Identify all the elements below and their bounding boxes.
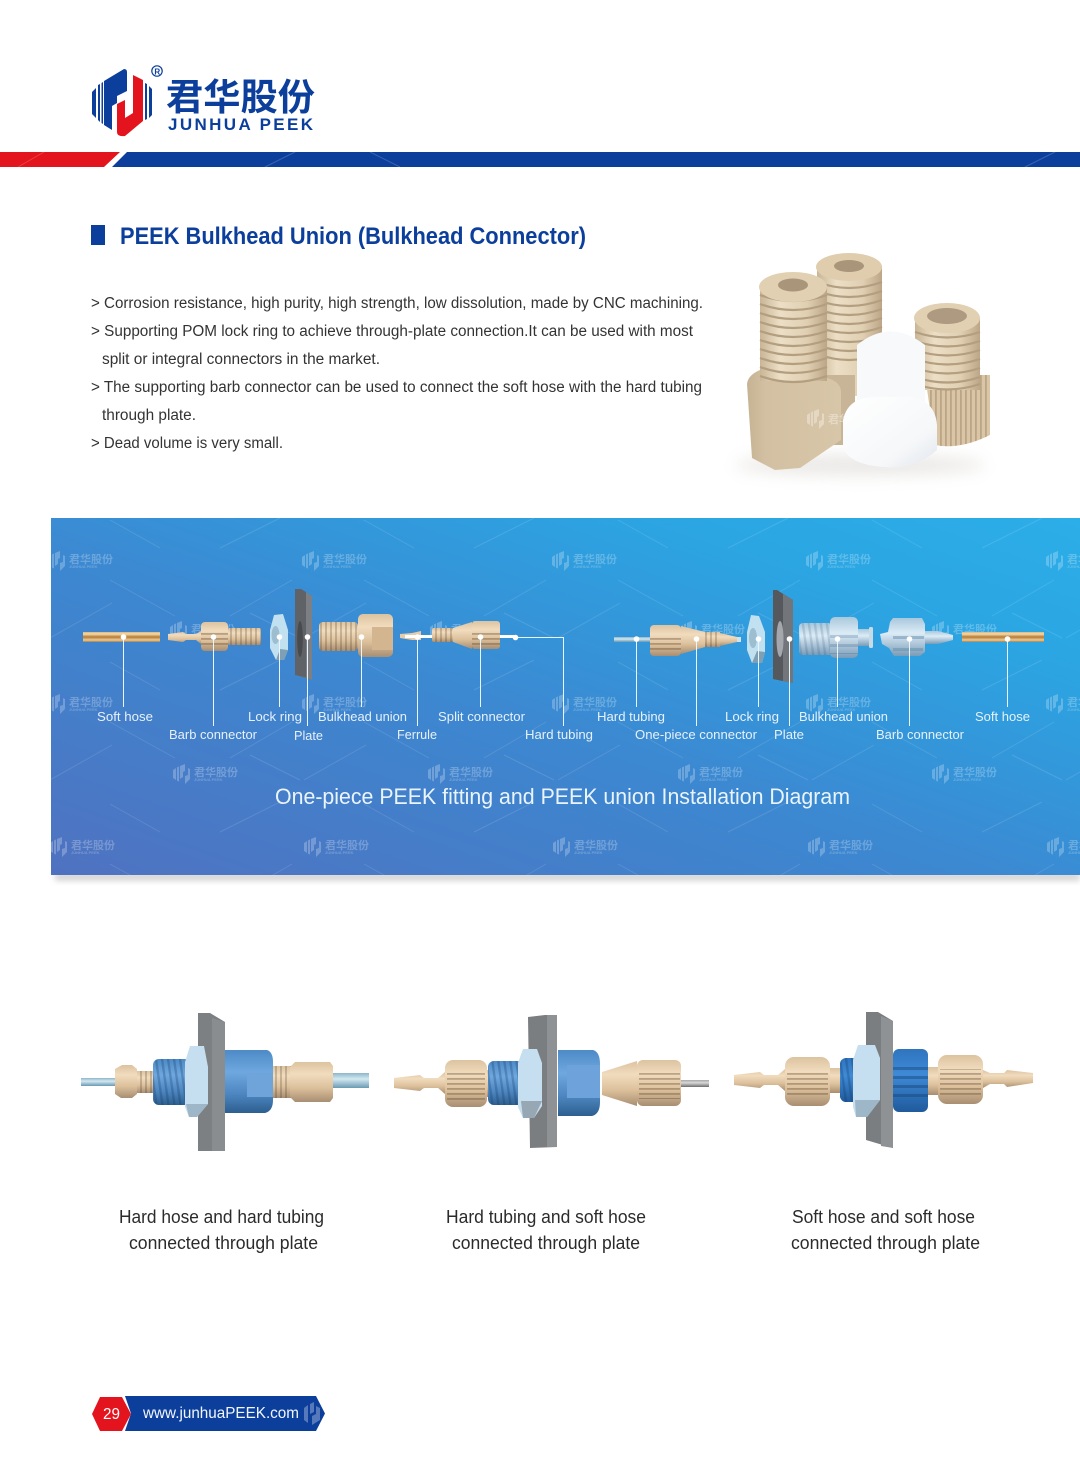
lock ring [747,615,765,663]
watermarks: JUNHUA PEEK [194,777,223,782]
photo watermark: 君华 [828,412,850,426]
ferrule [400,631,421,640]
blue thread [153,1059,190,1105]
watermarks: 君华股份 [953,622,997,636]
caption 1 [119,1207,324,1253]
watermarks: 君华股份 [323,695,367,709]
caption 1: connected through plate [129,1233,318,1253]
watermarks: 君华股份 [829,838,873,852]
blue thread [488,1061,523,1105]
page number hexagon [92,1397,131,1431]
brand logo [92,66,315,136]
dark blue thread [840,1058,858,1102]
watermarks: 君华股份 [194,765,238,779]
lock ring [518,1049,542,1118]
tan thread [137,1071,155,1093]
watermarks: 君华股份 [451,622,495,636]
watermarks: JUNHUA PEEK [449,777,478,782]
caption 3: Soft hose and soft hose [792,1207,975,1227]
knurled nut [637,1060,681,1106]
lock ring [853,1045,880,1117]
header band [0,152,1080,167]
plate [295,589,312,680]
part labels: Barb connector [876,727,965,742]
watermarks: JUNHUA PEEK [574,850,603,855]
website pill [125,1396,325,1431]
plate [528,1015,557,1148]
watermarks: JUNHUA PEEK [71,850,100,855]
split connector [405,621,516,649]
watermarks: JUNHUA PEEK [325,850,354,855]
hard tubing [614,637,652,642]
tan nut [115,1065,137,1098]
watermarks: JUNHUA PEEK [573,564,602,569]
watermarks: 君华股份 [323,552,367,566]
right assembly parts [614,590,1044,683]
plate [198,1013,225,1151]
lock ring [270,614,288,660]
soft hose [83,632,160,642]
watermarks: JUNHUA PEEK [573,707,602,712]
left barb [734,1069,785,1091]
watermarks: 君华股份 [573,695,617,709]
knurled nut [445,1060,487,1107]
lock ring [185,1046,208,1117]
right barb [983,1070,1033,1088]
watermarks: 君华股份 [191,622,235,636]
part labels: Bulkhead union [318,709,407,724]
watermarks: 君华股份 [69,695,113,709]
watermarks: JUNHUA PEEK [69,707,98,712]
blue body [220,1050,274,1113]
watermarks: 君华股份 [701,622,745,636]
caption 2: Hard tubing and soft hose [446,1207,646,1227]
caption 2 [446,1207,646,1253]
footer badge [92,1396,325,1431]
callout leader lines and dots [121,634,1010,726]
description text: > The supporting barb connector can be used to connect the soft hose with the hard tubing [91,379,702,396]
panel: installation diagram [48,518,1080,875]
logo Chinese name: 君华股份 [166,67,315,121]
heading marker [91,225,105,245]
watermarks: 君华股份 [71,838,115,852]
diagram title: One-piece PEEK fitting and PEEK union Installation Diagram [275,784,850,809]
watermarks: 君华股份 [325,838,369,852]
watermarks: 君华股份 [953,765,997,779]
tan hex nut [290,1062,333,1102]
left hex fitting [747,272,841,470]
page number hexagon: 29 [103,1406,120,1423]
registered mark: R [154,67,160,76]
watermarks: 君华股份 [574,838,618,852]
bulkhead union [319,614,393,657]
barb connector [168,622,261,651]
description text: > Supporting POM lock ring to achieve through-plate connection.It can be used with most [91,323,694,340]
registered mark [152,66,162,76]
part labels: Soft hose [975,709,1030,724]
part labels [97,709,1030,743]
right knurled nut [938,1055,983,1104]
part labels: Lock ring [725,709,779,724]
plate [773,590,793,683]
watermarks: JUNHUA PEEK [827,707,856,712]
description text [91,295,703,452]
panel shadow [55,872,1080,881]
watermarks [48,551,1080,857]
part labels: Plate [774,727,804,742]
part labels: Hard tubing [525,727,593,742]
barb connector [880,618,953,656]
part labels: Split connector [438,709,526,724]
watermarks: 君华股份 [827,695,871,709]
part labels: Ferrule [397,727,437,742]
part labels: Soft hose [97,709,153,724]
website pill: www.junhuaPEEK.com [142,1405,299,1422]
caption 3: connected through plate [791,1233,980,1253]
part labels: Lock ring [248,709,302,724]
barb [394,1072,445,1094]
one-piece connector [650,625,741,656]
photo watermark [807,409,850,429]
white lock ring [843,332,937,467]
part labels: Barb connector [169,727,258,742]
watermarks: JUNHUA PEEK [953,777,982,782]
description text: split or integral connectors in the market. [102,351,380,368]
left tube [81,1078,117,1086]
watermarks: JUNHUA PEEK [69,564,98,569]
description text: > Corrosion resistance, high purity, high strength, low dissolution, made by CNC machining. [91,295,703,312]
cone [602,1061,637,1106]
part labels: Plate [294,728,323,743]
caption 1: Hard hose and hard tubing [119,1207,324,1227]
caption 3 [791,1207,980,1253]
watermarks: 君华股份 [827,552,871,566]
tan thread [273,1066,292,1098]
watermarks: JUNHUA PEEK [827,564,856,569]
logo English name: JUNHUA PEEK [168,115,314,134]
blue knurled union [893,1049,928,1112]
watermarks: 君华股份 [573,552,617,566]
bulkhead union [799,617,873,658]
figure: hard hose and hard tubing [81,1013,369,1151]
right knurled fitting [914,303,990,446]
part labels: Hard tubing [597,709,665,724]
caption 2: connected through plate [452,1233,640,1253]
grey tube [681,1080,709,1087]
plate [866,1012,893,1148]
part labels: One-piece connector [635,727,758,742]
description text: > Dead volume is very small. [91,435,283,452]
watermarks: 君华股份 [69,552,113,566]
watermarks: 君华股份 [699,765,743,779]
back threaded fitting [816,253,882,445]
watermarks: 君华股份 [449,765,493,779]
product photo: PEEK fittings [735,253,990,475]
left assembly parts [83,589,516,680]
right tube [333,1073,369,1088]
figure: hard tubing and soft hose [394,1015,709,1148]
icon: logo mark [92,69,152,136]
watermarks: JUNHUA PEEK [323,564,352,569]
watermarks: JUNHUA PEEK [829,850,858,855]
left knurled nut [785,1057,830,1106]
blue body [558,1050,600,1116]
description text: through plate. [102,407,196,424]
figure: soft hose and soft hose [734,1012,1033,1148]
soft hose [962,632,1044,642]
watermarks: JUNHUA PEEK [323,707,352,712]
heading: PEEK Bulkhead Union (Bulkhead Connector) [120,223,586,250]
part labels: Bulkhead union [799,709,888,724]
watermarks: JUNHUA PEEK [699,777,728,782]
